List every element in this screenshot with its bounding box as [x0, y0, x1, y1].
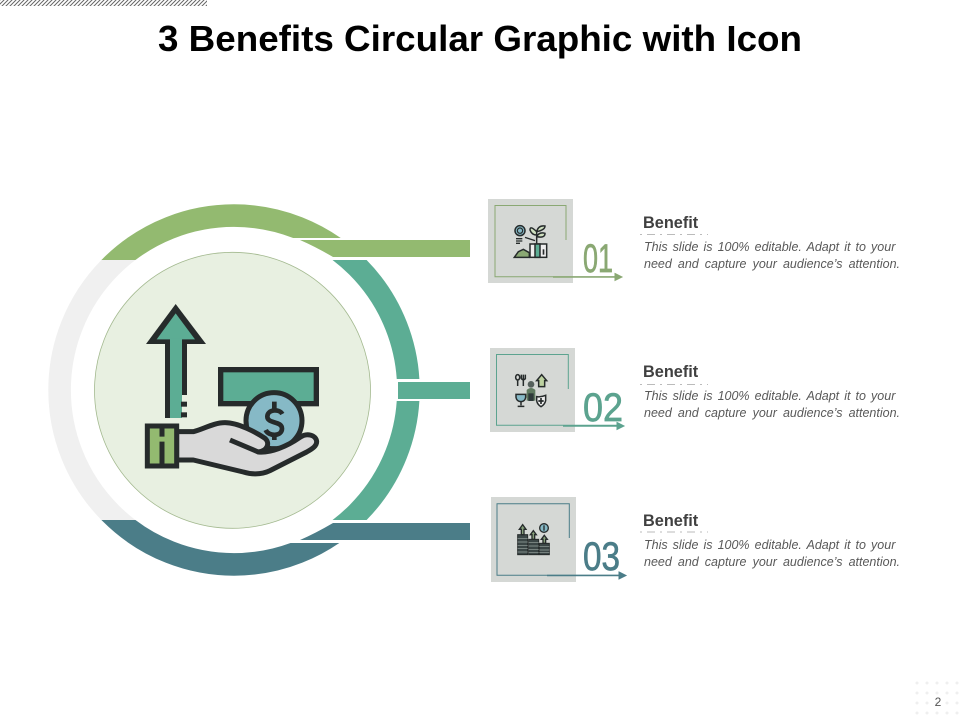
icon part: cuff — [147, 426, 177, 466]
icon: cutlery house person trophy shield — [516, 375, 547, 407]
ring segment: teal lower right — [332, 401, 420, 520]
number 01: 01 — [583, 237, 613, 281]
benefit row 3 — [491, 497, 900, 582]
frame and arrow 3 — [497, 504, 626, 579]
title: 3 Benefits Circular Graphic with Icon — [158, 18, 802, 59]
ring segment: grey left — [48, 260, 135, 520]
icon: hand holding coin with growth arrow — [146, 304, 317, 474]
icon part: hand — [177, 423, 317, 474]
icon: coin plant and boxes — [514, 226, 547, 257]
number 03: 03 — [583, 535, 620, 579]
connector bar: dark teal — [300, 523, 470, 540]
number 02: 02 — [583, 386, 623, 430]
ring segment: teal upper right — [332, 260, 420, 379]
connector bar: teal — [398, 382, 470, 399]
ring segment: dark teal bottom — [102, 520, 340, 576]
icon tile 3 — [491, 497, 576, 582]
dashed rule 2 — [640, 384, 708, 386]
page number: 2 — [935, 695, 942, 709]
icon part: thumb line — [230, 440, 258, 452]
body text 3: need and capture your audience’s attention. — [644, 555, 900, 569]
icon part: coin — [246, 393, 302, 449]
dashed rule 3 — [640, 531, 708, 533]
frame and arrow 1 — [495, 206, 622, 280]
benefit row 1 — [488, 199, 900, 283]
body text 1: need and capture your audience’s attention. — [644, 257, 900, 271]
icon part: up arrow — [146, 304, 206, 418]
body text 1 — [644, 240, 900, 271]
dashed rule 1 — [640, 234, 708, 236]
center circle — [94, 252, 370, 528]
connector bar: green — [300, 240, 470, 257]
benefit row 2 — [490, 348, 900, 432]
circular ring diagram — [60, 216, 470, 564]
icon: coin stacks with arrows — [518, 524, 549, 555]
icon part: banknote — [221, 370, 316, 404]
decorative hatch strip — [0, 0, 207, 6]
frame and arrow 2 — [496, 354, 624, 430]
body text 1: This slide is 100% editable. Adapt it to your — [644, 240, 896, 254]
body text 2: This slide is 100% editable. Adapt it to your — [644, 389, 896, 403]
heading: benefit 1: Benefit — [643, 214, 699, 232]
dot grid behind page number — [912, 680, 960, 720]
icon tile 1 — [488, 199, 573, 283]
icon tile 2 — [490, 348, 575, 432]
heading: benefit 2: Benefit — [643, 363, 699, 381]
body text 2: need and capture your audience’s attention. — [644, 406, 900, 420]
body text 2 — [644, 389, 900, 420]
body text 3: This slide is 100% editable. Adapt it to your — [644, 538, 896, 552]
body text 3 — [644, 538, 900, 569]
ring segment: green top — [102, 204, 341, 260]
heading: benefit 3: Benefit — [643, 512, 699, 530]
